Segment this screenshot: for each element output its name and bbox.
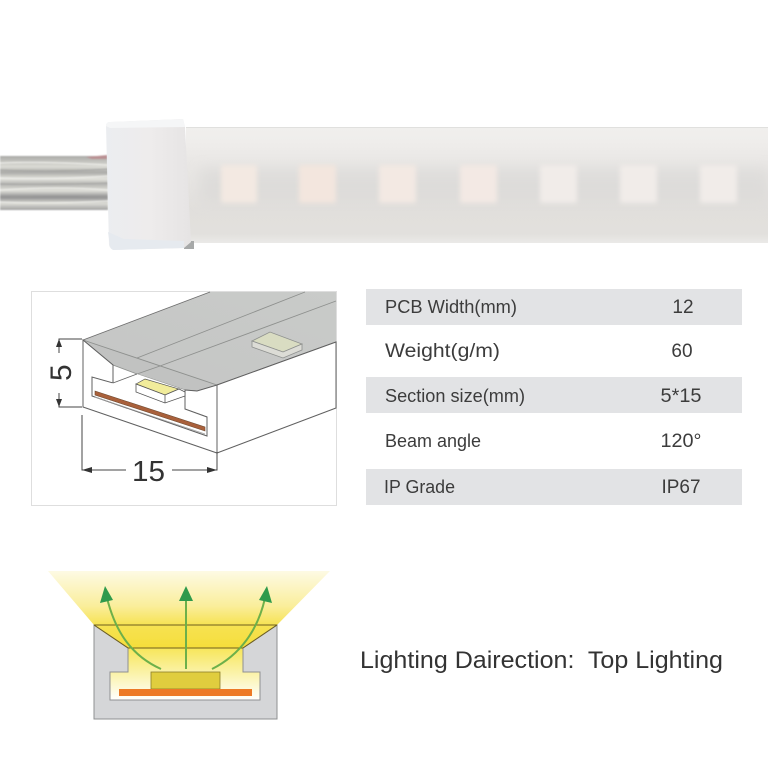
profile body bbox=[94, 625, 277, 719]
row: IP grade: IP67 bbox=[662, 477, 700, 498]
lens outlines bbox=[94, 625, 277, 648]
distant LED chip bbox=[252, 332, 302, 358]
LED chips glowing through the strip bbox=[221, 165, 737, 203]
arrows bbox=[100, 586, 272, 669]
row: section size bbox=[366, 377, 742, 413]
shaded band behind the LEDs bbox=[200, 168, 768, 202]
diagram: lighting direction cross-section bbox=[48, 571, 330, 719]
dimension: height 5: 5 bbox=[45, 364, 78, 381]
light beam bbox=[48, 571, 330, 648]
inner cavity with LED chip and PCB bbox=[95, 374, 207, 436]
dimension: width 15 bbox=[82, 415, 217, 488]
silicone strip body bbox=[186, 128, 768, 243]
PCB bbox=[119, 689, 252, 696]
end cap bbox=[106, 119, 194, 250]
row: section size: 5*15 bbox=[660, 386, 702, 407]
row: PCB width: PCB Width(mm) bbox=[385, 296, 517, 317]
PCB bbox=[95, 391, 205, 431]
row: IP grade: IP Grade bbox=[384, 476, 455, 497]
row: PCB width: 12 bbox=[672, 297, 694, 318]
arrow: left bbox=[100, 586, 161, 669]
row: beam angle: Beam angle bbox=[385, 430, 481, 451]
row: IP grade bbox=[366, 469, 742, 505]
dimension: width 15: 15 bbox=[132, 456, 165, 488]
panel frame bbox=[32, 292, 336, 506]
row: weight: 60 bbox=[671, 341, 693, 362]
panel: dimension diagram bbox=[32, 292, 336, 506]
photo: LED strip with end cap and wires bbox=[0, 119, 768, 250]
inner cavity glow bbox=[110, 648, 260, 700]
dimension: height 5 bbox=[45, 339, 82, 407]
strip top surface bbox=[83, 292, 336, 391]
arrow: centre bbox=[179, 586, 193, 669]
specification table bbox=[366, 289, 742, 505]
row: PCB width bbox=[366, 289, 742, 325]
LED chip bbox=[136, 379, 179, 395]
strip front and side faces bbox=[83, 340, 336, 453]
row: beam angle: 120° bbox=[660, 431, 702, 452]
row: beam angle bbox=[385, 430, 702, 452]
row: weight: Weight(g/m) bbox=[385, 340, 500, 362]
caption: lighting direction: Lighting Dairection: Top Lighting bbox=[360, 647, 723, 674]
strip edge highlights bbox=[186, 126, 768, 128]
row: section size: Section size(mm) bbox=[385, 385, 525, 406]
wires bbox=[0, 155, 108, 210]
LED chip bbox=[151, 672, 220, 689]
row: weight bbox=[385, 340, 693, 362]
arrow: right bbox=[212, 586, 272, 669]
